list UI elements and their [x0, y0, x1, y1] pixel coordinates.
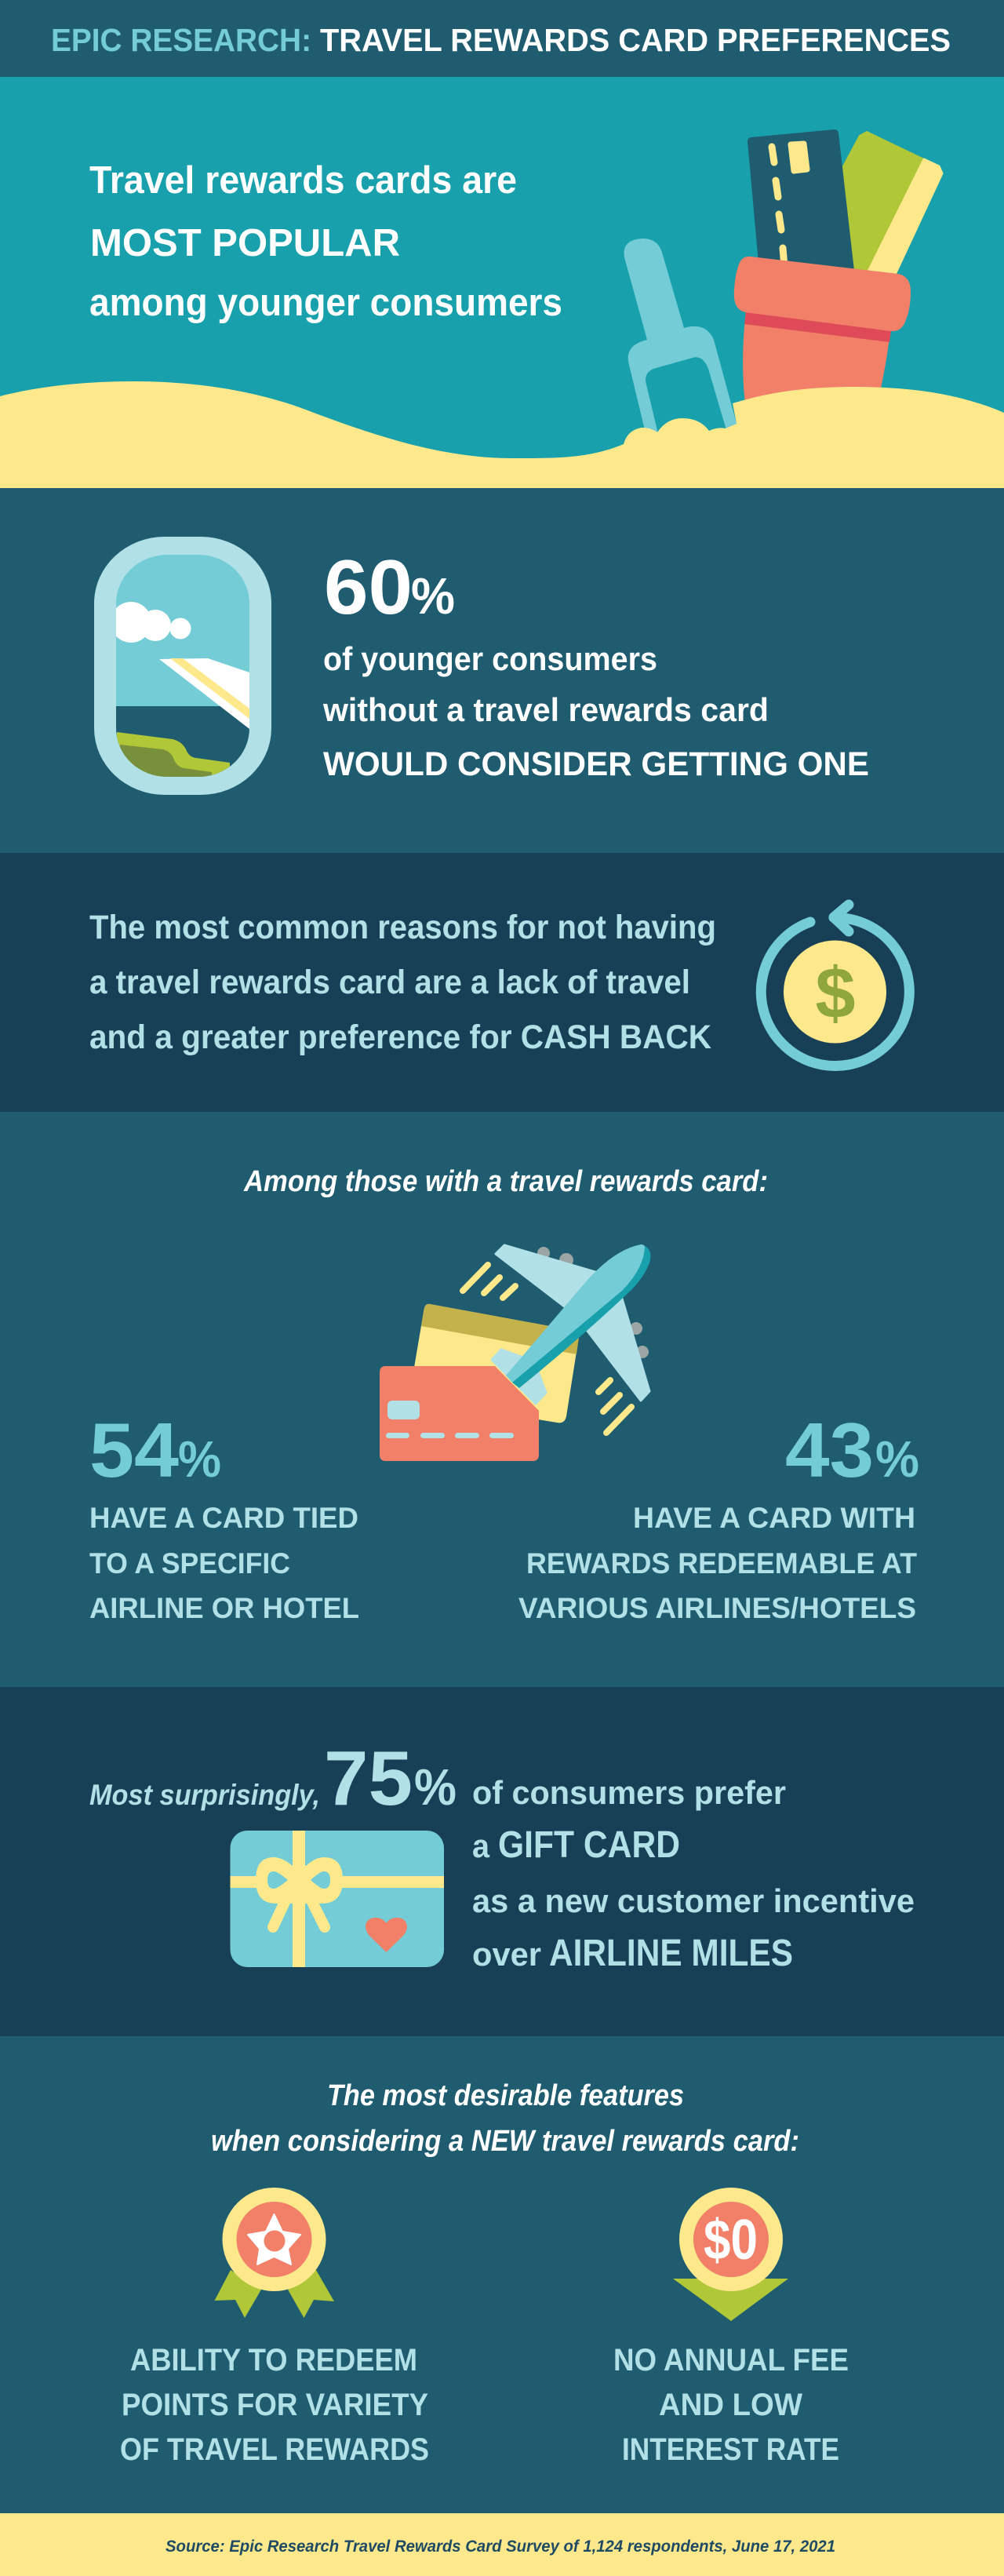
- panel: footer source: [0, 2513, 1004, 2576]
- panel: 60 percent: [94, 537, 868, 795]
- panel: among card holders: [0, 1112, 1004, 1687]
- feature label right: NO ANNUAL FEE: [613, 2343, 849, 2377]
- stat: 43%: 43: [785, 1407, 874, 1493]
- stat 43 description: [518, 1502, 917, 1624]
- reasons text: The most common reasons for not having: [89, 909, 716, 946]
- gift card text: GIFT CARD: [498, 1824, 680, 1866]
- gift card text: over: [472, 1936, 541, 1973]
- sand dune: [0, 381, 1004, 488]
- gift card text: a: [472, 1827, 490, 1864]
- panel: desirable features: [0, 2036, 1004, 2513]
- panel: gift card preference: [0, 1687, 1004, 2036]
- stat: 60%: [324, 544, 455, 630]
- lead-in text: Most surprisingly,: [89, 1779, 320, 1811]
- reasons text: and a greater preference for CASH BACK: [89, 1018, 711, 1056]
- stat: 54%: 54: [89, 1407, 179, 1493]
- stat: 60%: %: [411, 567, 455, 625]
- stat description: [322, 640, 869, 783]
- icon: gift card: [231, 1831, 444, 1967]
- stat description: of younger consumers: [323, 640, 657, 677]
- section heading: Among those with a travel rewards card:: [243, 1165, 768, 1198]
- icon: star medal: [215, 2188, 334, 2318]
- section heading: The most desirable features: [327, 2079, 684, 2112]
- icon: airplane window: [94, 537, 271, 795]
- section heading: [211, 2079, 799, 2158]
- stat: 54%: %: [178, 1430, 221, 1488]
- title: [51, 22, 951, 58]
- title: EPIC RESEARCH:: [51, 22, 311, 58]
- title: TRAVEL REWARDS CARD PREFERENCES: [320, 22, 951, 58]
- panel: header: [0, 0, 1004, 77]
- source text: Source: Epic Research Travel Rewards Card Survey of 1,124 respondents, June 17, 2021: [166, 2538, 835, 2556]
- stat 54 description: AIRLINE OR HOTEL: [89, 1592, 359, 1624]
- icon: sand scoop: [624, 239, 737, 434]
- feature label left: POINTS FOR VARIETY: [122, 2388, 428, 2422]
- icon: cash back coin: $: [815, 953, 856, 1033]
- stat 54 description: TO A SPECIFIC: [89, 1547, 290, 1579]
- icon: cards in bucket: [734, 132, 942, 404]
- stat: 75%: %: [414, 1758, 457, 1816]
- stat: 60%: 60: [324, 544, 413, 630]
- hero text: [89, 159, 562, 324]
- gift card text: AIRLINE MILES: [549, 1933, 793, 1974]
- gift card text: [472, 1774, 915, 1974]
- icon: zero dollar badge: $0: [704, 2209, 758, 2272]
- stat 43 description: REWARDS REDEEMABLE AT: [526, 1547, 917, 1579]
- hero text: among younger consumers: [89, 282, 562, 324]
- icon: cash back coin: [761, 905, 909, 1066]
- feature label right: AND LOW: [659, 2388, 802, 2422]
- feature label right: INTEREST RATE: [622, 2432, 839, 2467]
- stat: 54%: [89, 1407, 221, 1493]
- hero text: Travel rewards cards are: [89, 159, 517, 202]
- reasons text: a travel rewards card are a lack of travel: [89, 964, 690, 1001]
- feature label left: [120, 2343, 429, 2467]
- icon: zero dollar badge: [673, 2188, 788, 2321]
- stat description: without a travel rewards card: [322, 691, 769, 728]
- stat: 75%: 75: [324, 1735, 413, 1821]
- section heading: when considering a NEW travel rewards card:: [211, 2125, 799, 2158]
- gift card text: of consumers prefer: [472, 1774, 786, 1811]
- feature label right: [613, 2343, 849, 2467]
- stat 54 description: HAVE A CARD TIED: [89, 1502, 358, 1534]
- feature label left: ABILITY TO REDEEM: [130, 2343, 417, 2377]
- stat 43 description: HAVE A CARD WITH: [633, 1502, 915, 1534]
- stat 43 description: VARIOUS AIRLINES/HOTELS: [518, 1592, 916, 1624]
- reasons text: [89, 909, 716, 1056]
- hero text: MOST POPULAR: [90, 222, 400, 264]
- feature label left: OF TRAVEL REWARDS: [120, 2432, 429, 2467]
- stat: 43%: %: [875, 1430, 919, 1488]
- icon: plane and credit cards: [380, 1244, 650, 1461]
- panel: reasons: [0, 853, 1004, 1112]
- stat 54 description: [89, 1502, 359, 1624]
- gift card text: as a new customer incentive: [472, 1882, 915, 1919]
- panel: hero beach: [0, 77, 1004, 488]
- stat: 43%: [785, 1407, 919, 1493]
- stat: 75%: [324, 1735, 457, 1821]
- stat description: WOULD CONSIDER GETTING ONE: [323, 745, 869, 783]
